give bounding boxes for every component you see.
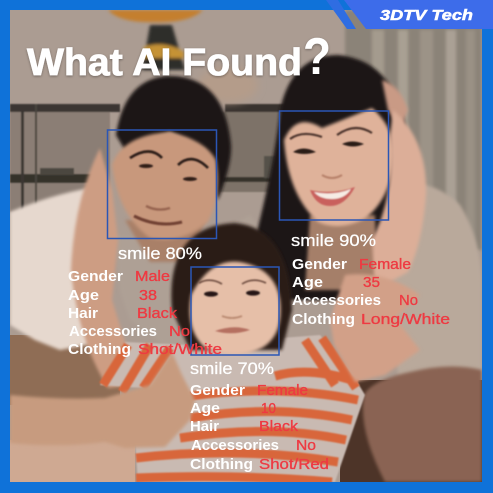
man's analysis text [68,244,222,358]
child's analysis text: No [296,437,316,454]
child's analysis text: Clothing [190,456,253,473]
title: What AI Found [27,42,302,84]
child's analysis text: 10 [261,400,276,417]
child's eyes and mouth [199,280,266,333]
woman's eyes and smile [290,128,372,206]
face box: man [108,130,216,238]
child's striped shirt [100,335,365,482]
woman's analysis text: Accessories [292,292,381,309]
woman's analysis text [291,231,450,328]
face box: woman [280,111,388,220]
woman's analysis text: smile 90% [291,231,376,250]
man's analysis text: Male [135,268,170,285]
man's neck [125,220,205,262]
man's analysis text: 38 [139,287,157,304]
shirt stripes [103,338,358,482]
sofa and man's lap area [10,335,120,405]
child's analysis text: Black [259,418,299,435]
woman's analysis text: Age [292,274,323,291]
man's analysis text: smile 80% [118,244,202,263]
man's analysis text: Accessories [69,323,157,340]
child's analysis text: Hair [190,418,219,435]
woman's analysis text: No [399,292,418,309]
woman's raised arm [372,110,426,290]
title: ? [303,28,331,86]
man's forearm and hand [10,352,195,448]
woman's hair [255,55,405,300]
man's shirt shadowed chest [115,215,270,350]
man's analysis text: Age [68,287,99,304]
man's analysis text: No [169,323,190,340]
woman's analysis text: 35 [363,274,380,291]
man's analysis text: Clothing [68,341,131,358]
decorative plant [206,74,252,108]
beige trousers [10,440,135,482]
child's analysis text [190,359,329,473]
man's analysis text: Gender [68,268,123,285]
man's analysis text: Shot/White [138,341,222,358]
woman's hand on head [382,80,408,130]
woman's analysis text: Gender [292,256,347,273]
child's analysis text: Age [190,400,220,417]
brand label: 3DTV Tech [380,7,473,24]
child's face [190,262,281,355]
child's analysis text: smile 70% [190,359,274,378]
child's hair [171,223,292,350]
corner ribbon [326,0,493,29]
child's analysis text: Accessories [191,437,279,454]
woman's analysis text: Female [359,256,411,273]
child's analysis text: Female [257,382,308,399]
pillow right [363,366,482,482]
woman's analysis text: Clothing [292,311,355,328]
man's analysis text: Black [137,305,178,322]
man's white shirt [10,188,89,352]
ribbon band [344,0,493,29]
title [27,28,331,86]
curtain [345,10,482,250]
child's analysis text: Gender [190,382,245,399]
pendant lamp [108,10,203,70]
woman's face [284,108,394,226]
woman's sweater [396,185,482,374]
man's analysis text: Hair [68,305,98,322]
man's hair [116,76,231,200]
sofa right [340,380,482,482]
woman's analysis text: Long/White [361,311,450,328]
woman's hands [330,274,420,382]
face box: child [191,267,279,355]
man's face [112,132,218,240]
child's analysis text: Shot/Red [259,456,329,473]
man's eyes and mouth [130,152,208,224]
shelves [10,104,285,214]
ribbon stripe [326,0,356,29]
woman's neck and chest [305,215,378,290]
woman's arm around man [69,148,126,390]
